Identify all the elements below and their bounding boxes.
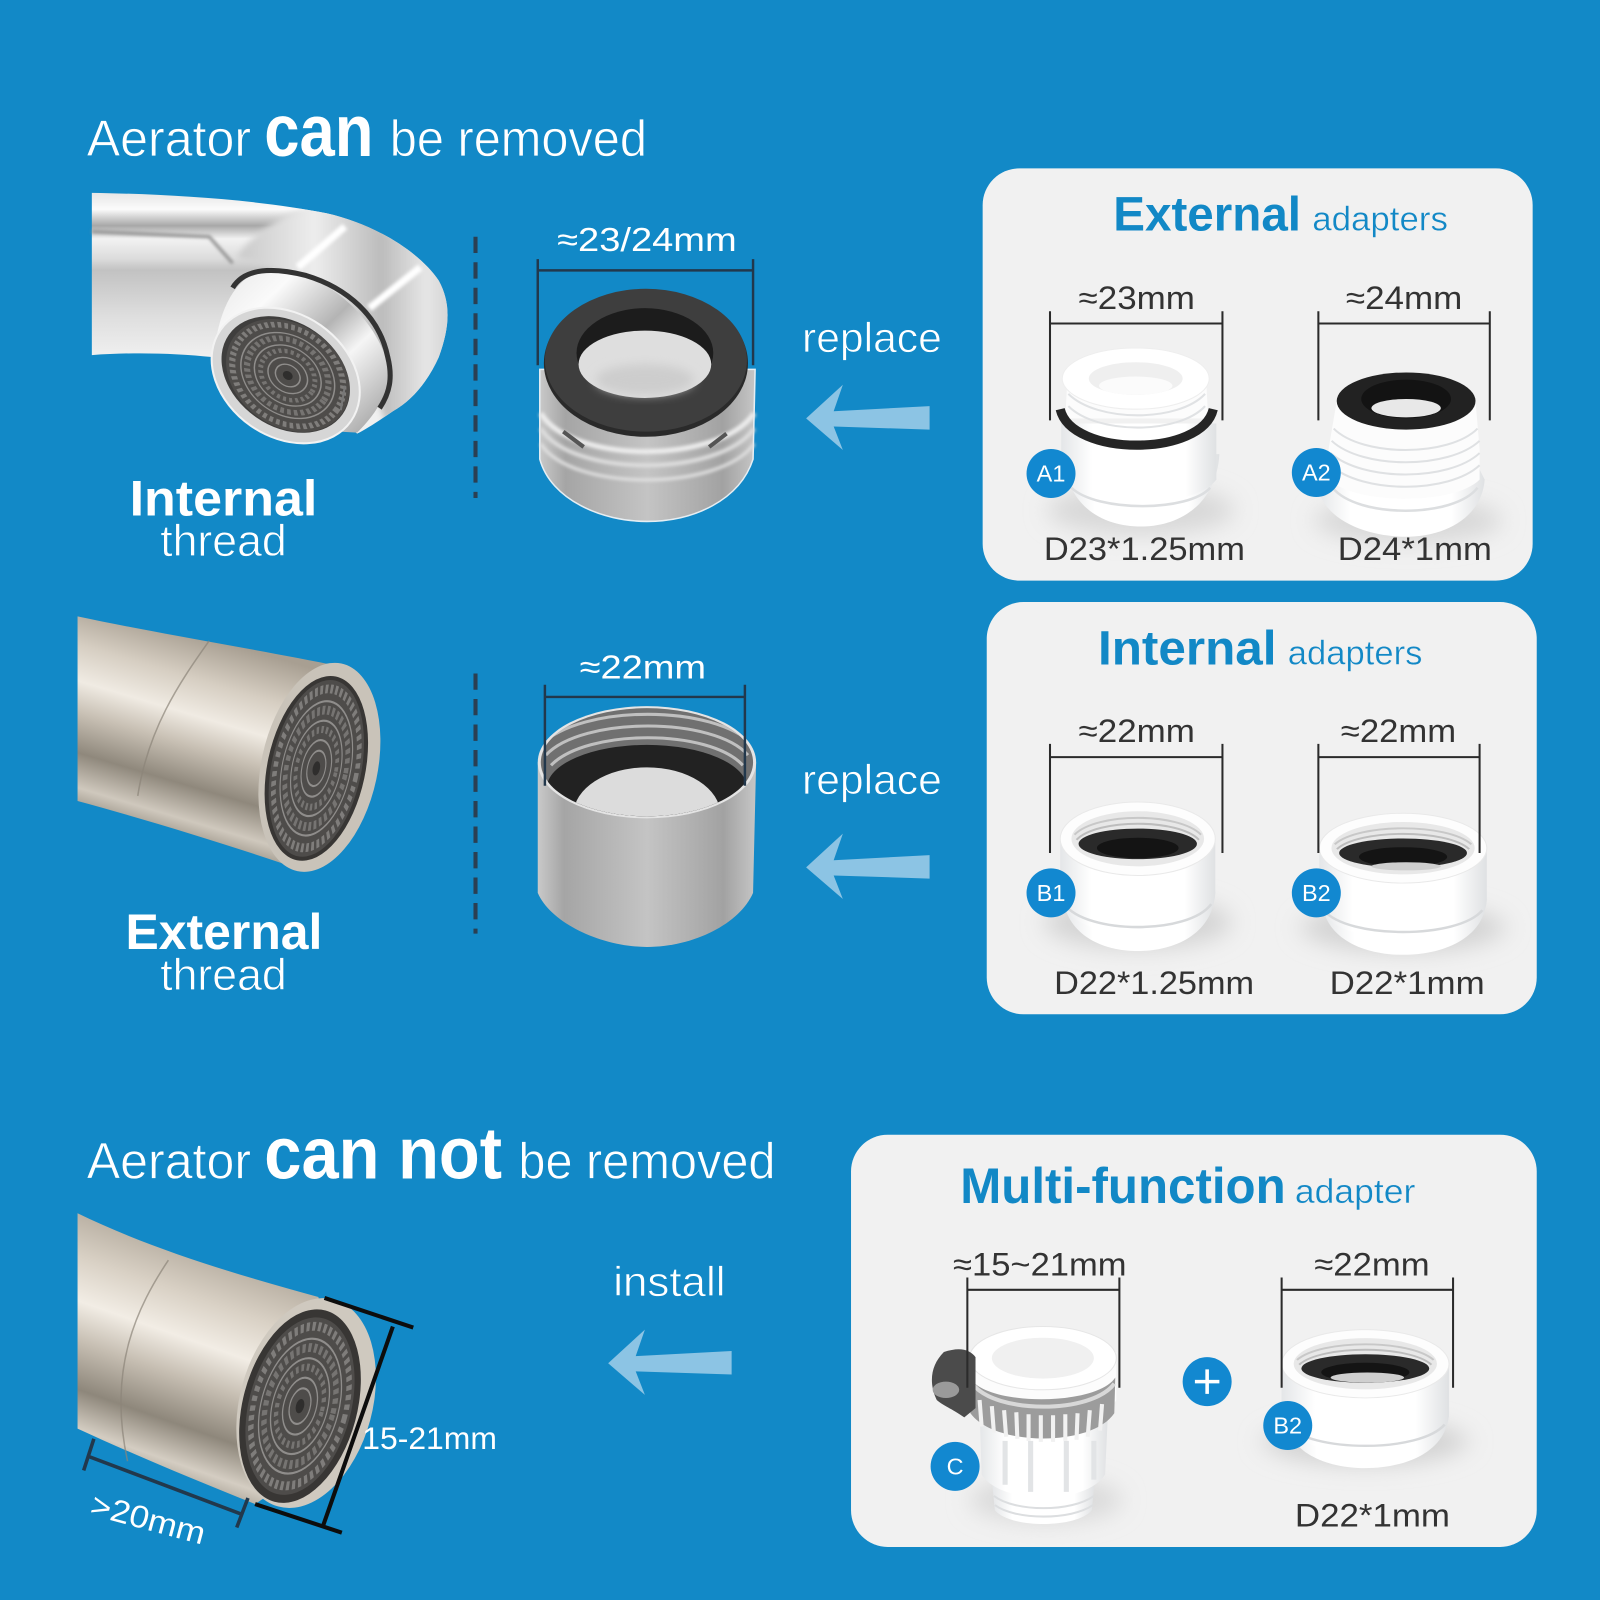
icon: brushed nickel faucet with external thread	[78, 616, 398, 883]
spec: D22*1mm: D22*1mm	[1295, 1497, 1450, 1534]
dimension: 22mm B2: ≈22mm	[1341, 712, 1456, 749]
icon: chrome faucet with internal thread	[90, 192, 448, 444]
icon: aerator with internal thread, sized 22mm	[531, 704, 765, 947]
icon: aerator with external thread, sized 23/24mm	[540, 289, 755, 521]
dimension: 23mm	[1050, 279, 1222, 420]
label: internal thread: Internal	[130, 470, 317, 526]
heading: aerator can not be removed: Aerator	[87, 1133, 251, 1190]
dimension: 22mm	[1282, 1246, 1453, 1388]
badge: C: C	[947, 1453, 964, 1479]
heading: aerator can be removed: be removed	[390, 110, 647, 167]
badge: A2: A2	[1302, 460, 1331, 486]
arrow: replace lower	[806, 834, 930, 899]
badge: B2: B2	[1273, 1413, 1302, 1439]
icon: faucet with non-removable aerator	[78, 1213, 398, 1524]
adapter B1	[1044, 802, 1232, 951]
panel: multi-function adapter	[851, 1135, 1537, 1547]
badge: B2	[1292, 868, 1341, 917]
panel: internal adapters	[987, 602, 1537, 1014]
spec: D23*1.25mm: D23*1.25mm	[1044, 530, 1245, 567]
panel heading: internal adapters: Internal	[1098, 622, 1277, 675]
icon: plus	[1183, 1357, 1232, 1406]
dimension: 22mm B1: ≈22mm	[1079, 712, 1195, 749]
heading: aerator can not be removed: be removed	[518, 1133, 776, 1190]
badge: B1: B1	[1037, 880, 1065, 906]
dimension: 24mm: ≈24mm	[1346, 279, 1462, 316]
panel heading: external adapters	[1113, 189, 1448, 242]
panel: external adapters	[983, 168, 1533, 581]
spec: D24*1mm: D24*1mm	[1338, 530, 1492, 567]
dimension: 23mm: ≈23mm	[1079, 279, 1195, 316]
divider: lower	[474, 673, 478, 934]
label: replace (upper): replace	[802, 314, 942, 361]
badge: A1: A1	[1037, 461, 1065, 487]
dimension: 15 to 21mm	[953, 1246, 1127, 1388]
spec: D22*1mm: D22*1mm	[1330, 964, 1485, 1001]
adapter A2	[1314, 372, 1502, 543]
spec: D22*1.25mm: D22*1.25mm	[1054, 964, 1254, 1001]
panel heading: internal adapters: adapters	[1288, 634, 1422, 672]
label: external thread: External	[126, 904, 322, 960]
heading: aerator can be removed: can	[264, 89, 373, 172]
dimension: 22mm	[545, 650, 745, 786]
label: internal thread	[130, 470, 317, 566]
dimension: 15-21mm: 15-21mm	[362, 1420, 497, 1456]
badge: A1	[1027, 449, 1076, 498]
panel heading: multi-function adapter: Multi-function	[960, 1158, 1286, 1214]
heading: aerator can not be removed	[87, 1112, 776, 1195]
badge: A2	[1292, 448, 1341, 497]
label: external thread: thread	[160, 949, 287, 1000]
dimension: 24mm	[1318, 279, 1490, 420]
heading: aerator can not be removed: can not	[264, 1112, 502, 1195]
badge: B1	[1027, 868, 1076, 917]
dimension: greater than 20mm: >20mm	[87, 1486, 210, 1551]
arrow: replace upper	[806, 385, 930, 450]
panel heading: internal adapters	[1098, 622, 1422, 675]
label: external thread	[126, 904, 322, 1000]
panel heading: external adapters: adapters	[1312, 201, 1448, 239]
divider: upper	[474, 237, 478, 498]
label: install: install	[613, 1258, 726, 1305]
adapter A1	[1047, 348, 1235, 535]
panel heading: external adapters: External	[1113, 189, 1301, 242]
dimension: 15 to 21mm: ≈15~21mm	[953, 1246, 1127, 1283]
heading: aerator can be removed: Aerator	[87, 110, 251, 167]
adapter B2	[1302, 813, 1504, 955]
dimension: 22mm B2	[1318, 712, 1480, 853]
adapter B2	[1264, 1330, 1467, 1468]
dimension: 22mm: ≈22mm	[1314, 1246, 1430, 1283]
arrow: install	[608, 1330, 732, 1395]
panel heading: multi-function adapter: adapter	[1295, 1173, 1415, 1211]
badge: B2: B2	[1302, 880, 1331, 906]
dimension: 23/24mm: ≈23/24mm	[557, 222, 737, 259]
label: internal thread: thread	[160, 515, 287, 566]
label: replace (lower): replace	[802, 756, 942, 803]
badge: B2	[1263, 1401, 1312, 1450]
heading: aerator can be removed	[87, 89, 647, 172]
dimension: 22mm B1	[1050, 712, 1222, 853]
adapter C with clamp	[932, 1327, 1122, 1524]
dimension: greater than 20mm	[84, 1439, 248, 1551]
dimension: 23/24mm	[538, 222, 753, 365]
dimension: 22mm: ≈22mm	[580, 650, 706, 687]
dimension: 15-21mm	[255, 1298, 497, 1533]
badge: C	[931, 1442, 980, 1491]
